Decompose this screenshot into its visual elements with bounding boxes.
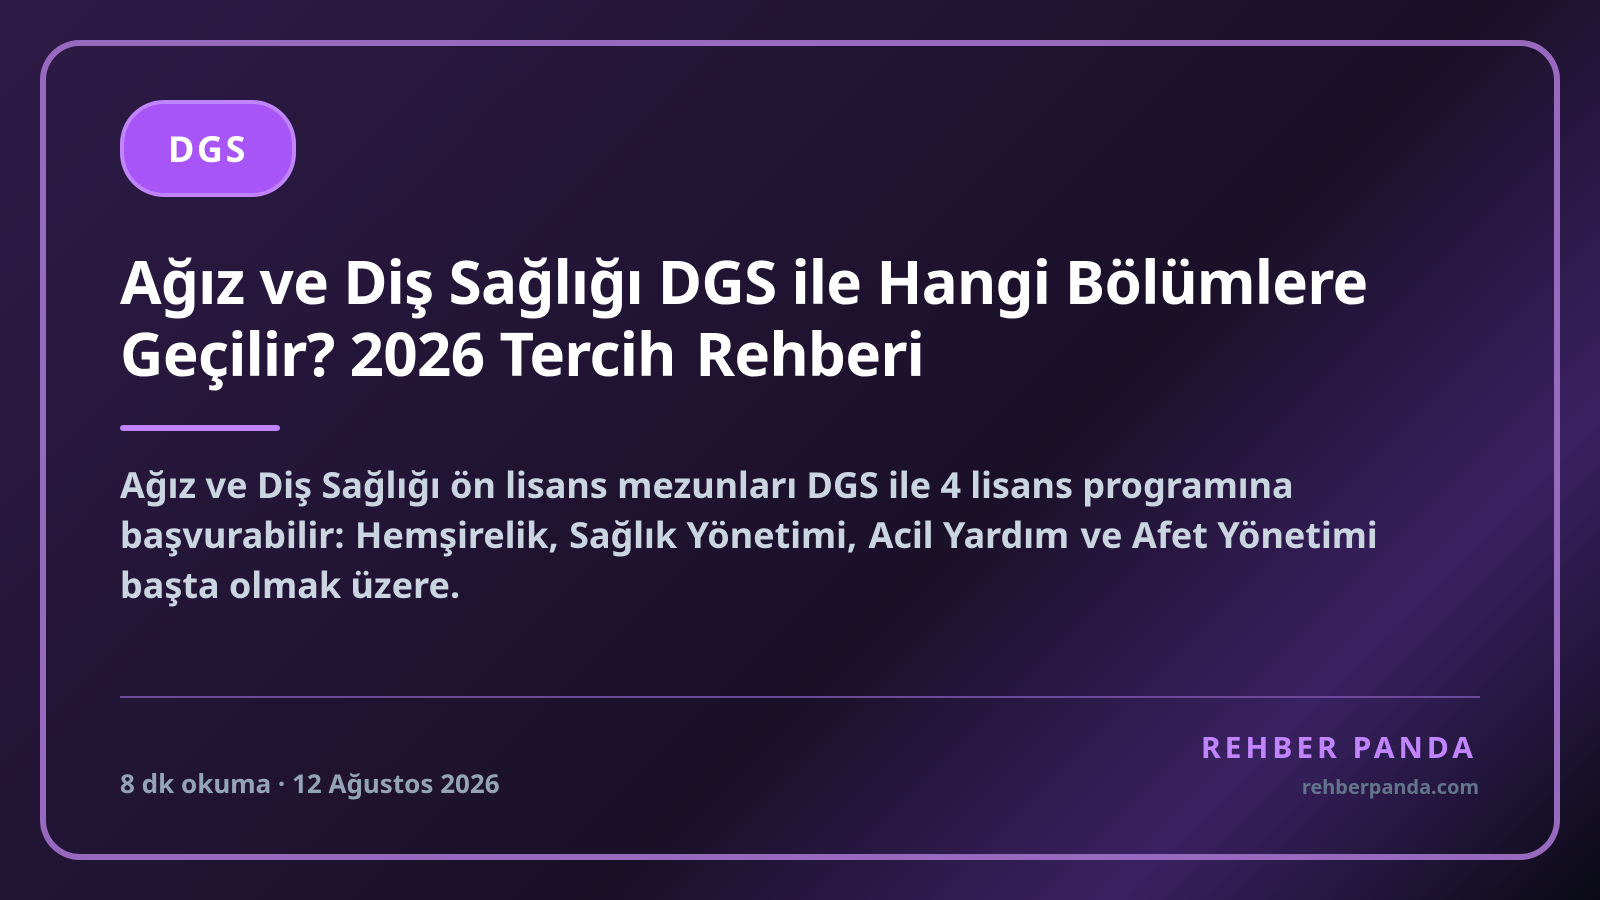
title: Geçilir? 2026 Tercih Rehberi — [120, 312, 924, 394]
brand name: REHBER PANDA — [1201, 726, 1477, 767]
description text: başta olmak üzere. — [120, 560, 460, 609]
description text — [120, 460, 1378, 609]
badge: DGS: DGS — [168, 124, 248, 173]
website url: rehberpanda.com — [1302, 773, 1479, 800]
accent rule — [120, 425, 280, 431]
title — [120, 240, 1368, 394]
description text: Ağız ve Diş Sağlığı ön lisans mezunları DGS ile 4 lisans programına — [120, 460, 1294, 509]
reading time and date: 8 dk okuma · 12 Ağustos 2026 — [120, 765, 500, 801]
title: Ağız ve Diş Sağlığı DGS ile Hangi Bölümlere — [120, 240, 1368, 322]
badge: DGS — [120, 100, 296, 197]
footer divider — [120, 696, 1480, 698]
description text: başvurabilir: Hemşirelik, Sağlık Yönetimi, Acil Yardım ve Afet Yönetimi — [120, 510, 1378, 559]
